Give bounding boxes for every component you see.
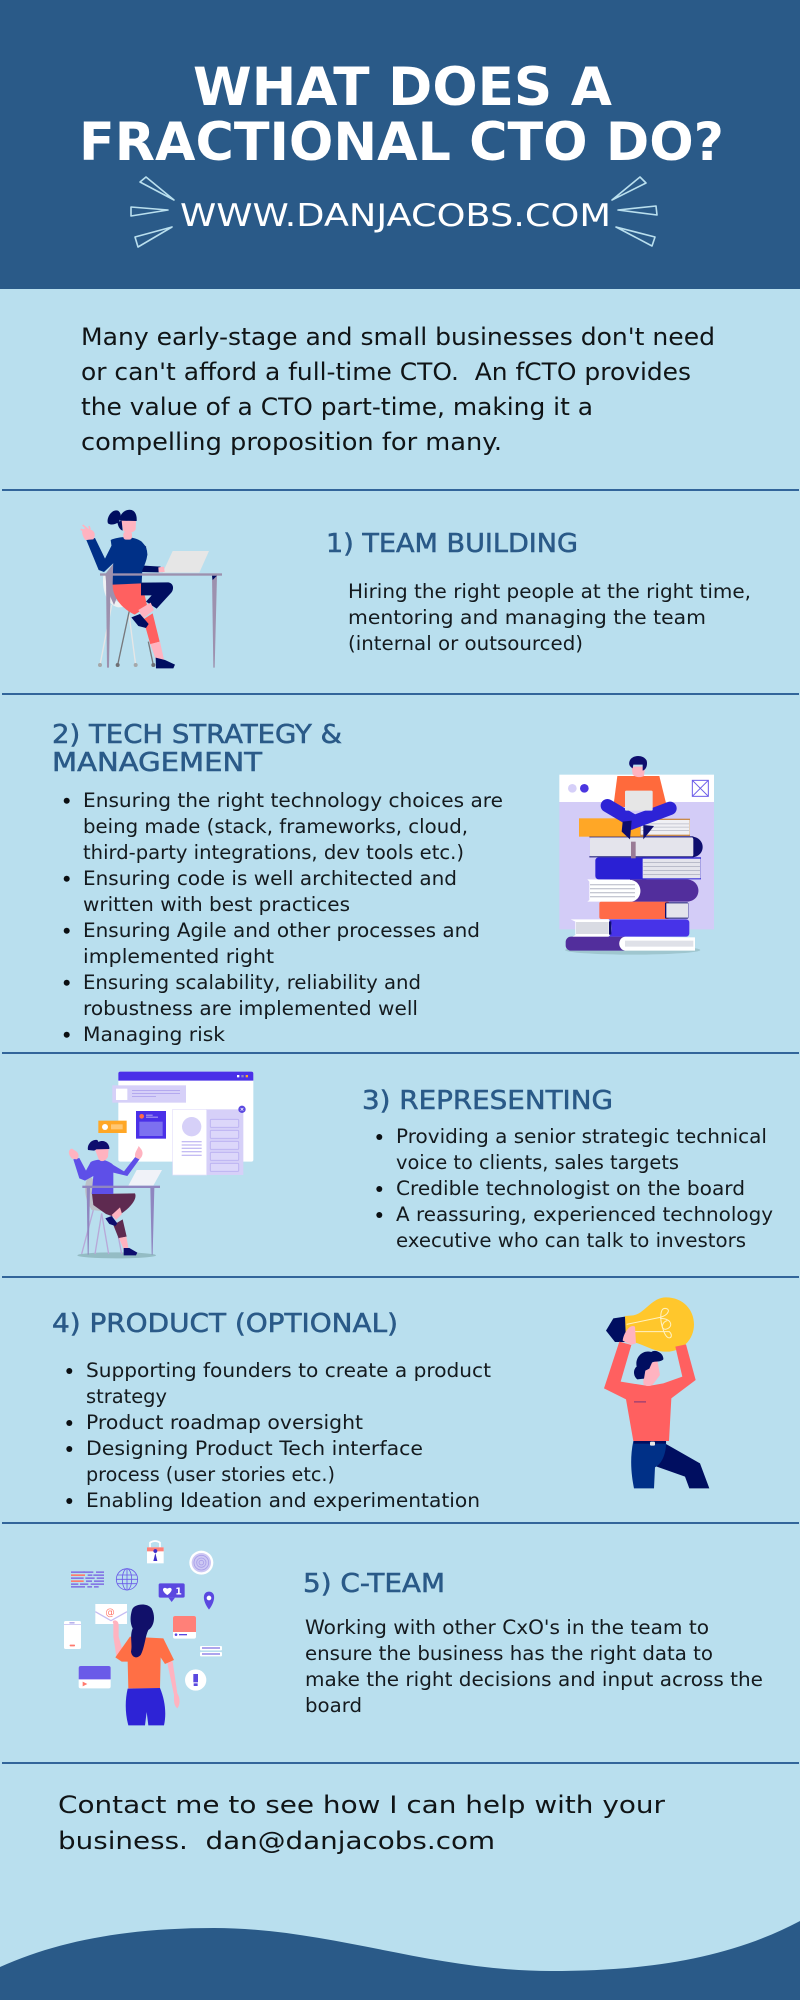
icon: left burst spikes [131,177,174,247]
contact text: Contact me to see how I can help with your [58,1791,665,1819]
list: tech strategy bullets: written with best practices [83,893,350,916]
list: tech strategy bullets: robustness are implemented well [83,997,418,1020]
icon: woman at desk with interface mockups [69,1072,253,1258]
text: team building description: mentoring and managing the team [348,606,706,629]
intro text: compelling proposition for many. [81,428,502,456]
text: team building description [348,580,751,655]
list: representing bullets: voice to clients, sales targets [396,1151,679,1174]
list: tech strategy bullets: Ensuring code is well architected and [83,867,457,890]
text: c-team description [305,1616,763,1717]
icon: woman surrounded by app icons: 1 [175,1586,182,1597]
intro text [81,323,715,456]
text: c-team description: board [305,1694,362,1717]
icon: woman at desk with laptop [81,510,222,668]
heading: c-team: 5) C-TEAM [303,1569,445,1599]
list: tech strategy bullets [64,789,503,1046]
panel: c-team [64,1541,763,1725]
panel: product [52,1297,709,1512]
intro text: Many early-stage and small businesses don't need [81,323,715,351]
icon: woman surrounded by app icons [64,1541,222,1725]
list: product bullets [66,1359,491,1512]
list: product bullets: Product roadmap oversight [86,1411,363,1434]
icon: right burst spikes [612,177,657,246]
icon: man with laptop on stack of books [559,756,714,955]
header banner [0,0,800,289]
contact text [58,1791,665,1855]
list: representing bullets: Providing a senior strategic technical [396,1125,767,1148]
text: c-team description: Working with other CxO's in the team to [305,1616,709,1639]
footer wave [0,1921,800,2000]
list: product bullets: Designing Product Tech interface [86,1437,423,1460]
contact text: business. dan@danjacobs.com [58,1827,495,1855]
list: representing bullets: executive who can talk to investors [396,1229,746,1252]
text: team building description: (internal or outsourced) [348,632,583,655]
panel: team building [81,510,751,668]
title [79,57,724,173]
text: c-team description: ensure the business has the right data to [305,1642,713,1665]
icon: woman surrounded by app icons: @ [105,1607,115,1618]
list: tech strategy bullets: implemented right [83,945,274,968]
list: product bullets: process (user stories etc.) [86,1463,335,1486]
title: WHAT DOES A [193,57,612,118]
list: product bullets: Supporting founders to create a product [86,1359,491,1382]
list: representing bullets: Credible technologist on the board [396,1177,745,1200]
heading: product: 4) PRODUCT (OPTIONAL) [52,1309,398,1339]
list: tech strategy bullets: Ensuring the right technology choices are [83,789,503,812]
heading: representing: 3) REPRESENTING [362,1086,613,1116]
icon: man holding a light bulb [604,1297,709,1488]
list: tech strategy bullets: Ensuring scalability, reliability and [83,971,421,994]
title: FRACTIONAL CTO DO? [79,112,724,173]
text: c-team description: make the right decisions and input across the [305,1668,763,1691]
list: tech strategy bullets: third-party integrations, dev tools etc.) [83,841,464,864]
list: representing bullets: A reassuring, experienced technology [396,1203,773,1226]
heading: tech strategy: 2) TECH STRATEGY & [52,720,342,750]
heading: tech strategy [52,720,342,778]
panel: tech strategy and management [52,720,714,1046]
list: representing bullets [376,1125,773,1252]
list: product bullets: strategy [86,1385,167,1408]
text: team building description: Hiring the right people at the right time, [348,580,751,603]
website url: WWW.DANJACOBS.COM [180,198,611,234]
list: tech strategy bullets: being made (stack, frameworks, cloud, [83,815,468,838]
list: tech strategy bullets: Ensuring Agile and other processes and [83,919,480,942]
intro text: or can't afford a full-time CTO. An fCTO provides [81,358,691,386]
panel: representing [69,1072,773,1258]
list: product bullets: Enabling Ideation and experimentation [86,1489,480,1512]
list: tech strategy bullets: Managing risk [83,1023,226,1046]
heading: team building: 1) TEAM BUILDING [326,529,578,559]
intro text: the value of a CTO part-time, making it a [81,393,593,421]
heading: tech strategy: MANAGEMENT [52,748,262,778]
